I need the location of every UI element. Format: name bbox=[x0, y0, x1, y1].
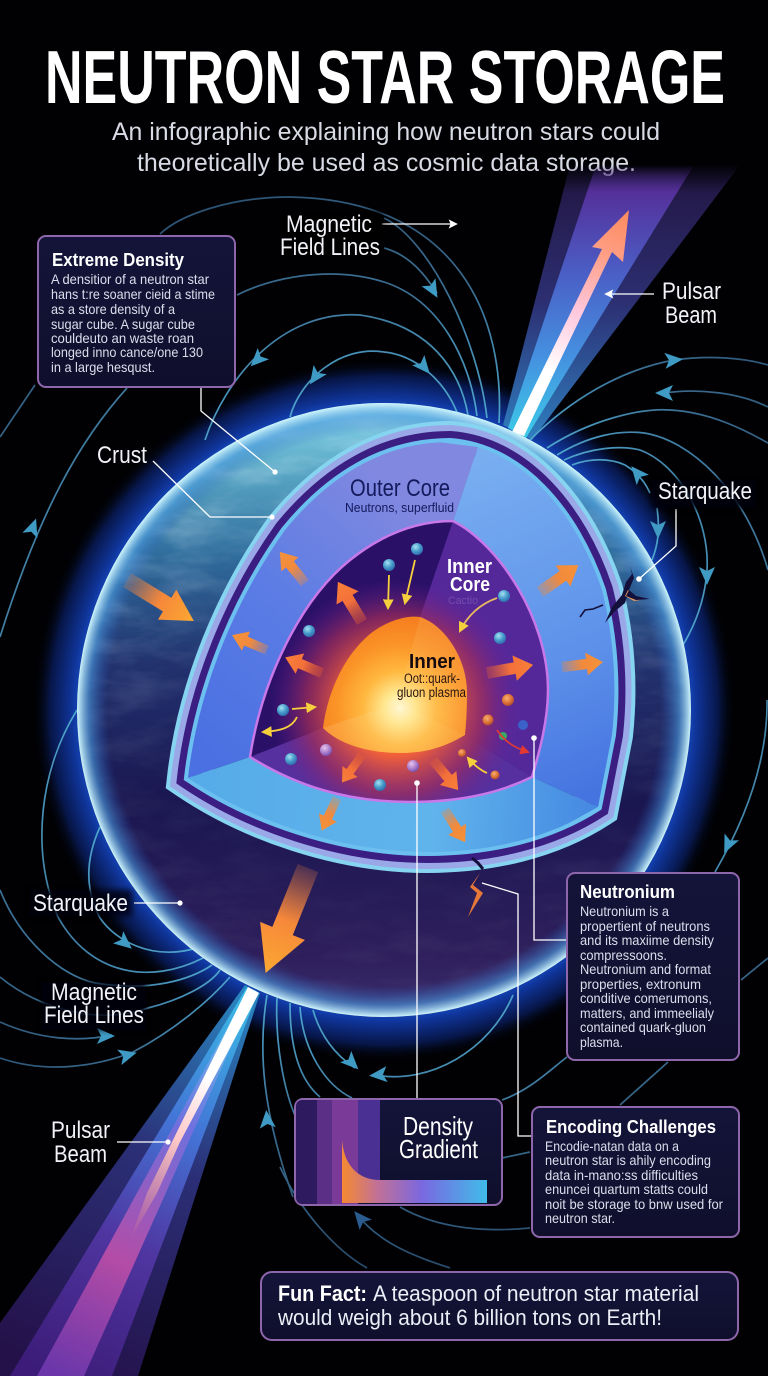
label: pulsar beam top: Pulsar bbox=[662, 278, 721, 305]
leader: crust bbox=[153, 461, 275, 520]
label: core centre bbox=[397, 651, 466, 700]
label: magnetic field lines top: Field Lines bbox=[280, 234, 380, 261]
label: crust: Crust bbox=[97, 442, 147, 469]
label: pulsar beam top bbox=[662, 278, 721, 329]
text block: encoding challenges: neutron star is ahily encoding bbox=[545, 1152, 711, 1168]
text block: extreme density: as a store density of a bbox=[51, 301, 175, 317]
text block: neutronium: conditive comerumons, bbox=[580, 990, 712, 1006]
text block: extreme density: sugar cube. A sugar cube bbox=[51, 316, 195, 332]
label: magnetic field lines lower: Field Lines bbox=[44, 1002, 144, 1029]
leader: extreme density bbox=[201, 388, 278, 475]
text block: extreme density: hans t:re soaner cieid a stime bbox=[51, 286, 215, 302]
panel: fun fact: would weigh about 6 billion tons on Earth! bbox=[277, 1305, 662, 1330]
label: magnetic field lines top: Magnetic bbox=[286, 211, 372, 238]
panel: extreme density bbox=[38, 236, 235, 387]
field line direction arrowheads bbox=[22, 278, 739, 1230]
heading: neutronium: Neutronium bbox=[580, 881, 675, 902]
panel: fun fact: A teaspoon of neutron star material bbox=[373, 1281, 699, 1306]
label: outer core: Outer Core bbox=[350, 475, 450, 502]
label: inner core: Core bbox=[450, 574, 490, 596]
text block: encoding challenges: Encodie-natan data on a bbox=[545, 1138, 679, 1154]
text block: neutronium: Neutronium and format bbox=[580, 961, 711, 977]
text block: extreme density bbox=[51, 271, 215, 375]
label: magnetic field lines top bbox=[280, 211, 380, 261]
label: starquake right: Starquake bbox=[658, 478, 752, 505]
text block: encoding challenges: data in-mano:ss difficulties bbox=[545, 1167, 698, 1183]
label: starquake left: Starquake bbox=[33, 890, 128, 917]
leader: magnetic field lines top bbox=[382, 223, 456, 225]
large compression arrow lower bbox=[243, 859, 330, 982]
text block: encoding challenges: neutron star. bbox=[545, 1210, 615, 1226]
text block: extreme density: longed inno cance/one 130 bbox=[51, 344, 203, 360]
pressure arrows in inner core bbox=[281, 575, 535, 797]
large compression arrow upper left bbox=[118, 565, 203, 636]
panel: neutronium bbox=[567, 873, 739, 1060]
pulsar beam: downward bbox=[0, 985, 260, 1376]
text block: encoding challenges: enuncei quartum statts could bbox=[545, 1181, 708, 1197]
subtitle: theoretically be used as cosmic data storage. bbox=[137, 149, 636, 177]
heading: extreme density: Extreme Density bbox=[52, 249, 185, 270]
label: density gradient: Density bbox=[403, 1111, 473, 1141]
text block: extreme density: in a large hesqust. bbox=[51, 359, 155, 375]
leader: density gradient bbox=[414, 780, 420, 1100]
inner core shell bbox=[248, 520, 550, 804]
starquake crack upper right bbox=[580, 566, 650, 623]
label: magnetic field lines lower bbox=[44, 979, 144, 1029]
label: density gradient bbox=[399, 1111, 479, 1164]
outer core faces bbox=[188, 442, 614, 852]
panel: density gradient bbox=[295, 1099, 502, 1205]
text block: neutronium: contained quark-gluon bbox=[580, 1019, 706, 1035]
glowing core bbox=[323, 617, 467, 753]
text block: extreme density: A densitior of a neutron star bbox=[51, 271, 209, 287]
star halo glow bbox=[32, 358, 736, 1062]
pulsar beam: upward bbox=[503, 165, 740, 440]
subtitle bbox=[112, 118, 660, 177]
subtitle: An infographic explaining how neutron stars could bbox=[112, 118, 660, 146]
label: inner core bbox=[447, 556, 492, 607]
label: density gradient: Gradient bbox=[399, 1134, 479, 1164]
text block: encoding challenges: noit be storage to bnw used for bbox=[545, 1196, 723, 1212]
starquake crack lower bbox=[468, 858, 483, 917]
label: inner core: Inner bbox=[447, 556, 492, 578]
panel: encoding challenges bbox=[532, 1107, 739, 1237]
label: magnetic field lines lower: Magnetic bbox=[51, 979, 137, 1006]
leader: pulsar beam top bbox=[606, 293, 654, 295]
core labels bbox=[345, 475, 492, 700]
particles bbox=[277, 543, 528, 791]
leader: encoding challenges bbox=[482, 883, 532, 1136]
text block: neutronium: and its maxiime density bbox=[580, 932, 714, 948]
label: pulsar beam lower: Beam bbox=[54, 1141, 107, 1168]
panel: fun fact: Fun Fact: bbox=[278, 1281, 367, 1306]
cutaway shell layers bbox=[188, 442, 614, 852]
label: inner core: Cactio bbox=[448, 595, 478, 607]
label: pulsar beam lower: Pulsar bbox=[51, 1117, 110, 1144]
text block: neutronium: matters, and immeelialy bbox=[580, 1005, 714, 1021]
text block: extreme density: couldeuto an waste roan bbox=[51, 330, 194, 346]
label: outer core description: Neutrons, superfluid bbox=[345, 500, 454, 515]
text block: neutronium: propertient of neutrons bbox=[580, 918, 710, 934]
chart: density gradient bands bbox=[296, 1100, 487, 1204]
label: core centre: gluon plasma bbox=[397, 685, 466, 700]
text block: neutronium: Neutronium is a bbox=[580, 903, 669, 919]
text block: neutronium: plasma. bbox=[580, 1034, 623, 1050]
text block: neutronium: properties, extronum bbox=[580, 976, 701, 992]
text block: encoding challenges bbox=[545, 1138, 723, 1226]
particle motion arrows bbox=[263, 560, 528, 773]
leader: neutronium bbox=[531, 735, 567, 940]
text block: neutronium bbox=[580, 903, 714, 1050]
label: pulsar beam top: Beam bbox=[665, 302, 717, 329]
label: core centre: Oot::quark- bbox=[404, 671, 460, 686]
label: core centre: Inner bbox=[409, 651, 455, 673]
heading: encoding challenges: Encoding Challenges bbox=[546, 1116, 716, 1137]
text block: neutronium: compressoons. bbox=[580, 947, 667, 963]
magnetic field lines bbox=[0, 197, 768, 1268]
neutron star sphere crust bbox=[70, 400, 700, 1025]
leader: starquake left bbox=[134, 900, 183, 906]
pressure arrows in outer core bbox=[228, 545, 604, 848]
leader: starquake right bbox=[636, 509, 676, 582]
leader: pulsar beam lower bbox=[117, 1139, 171, 1145]
panel: fun fact bbox=[261, 1272, 738, 1340]
label: pulsar beam lower bbox=[51, 1117, 110, 1168]
